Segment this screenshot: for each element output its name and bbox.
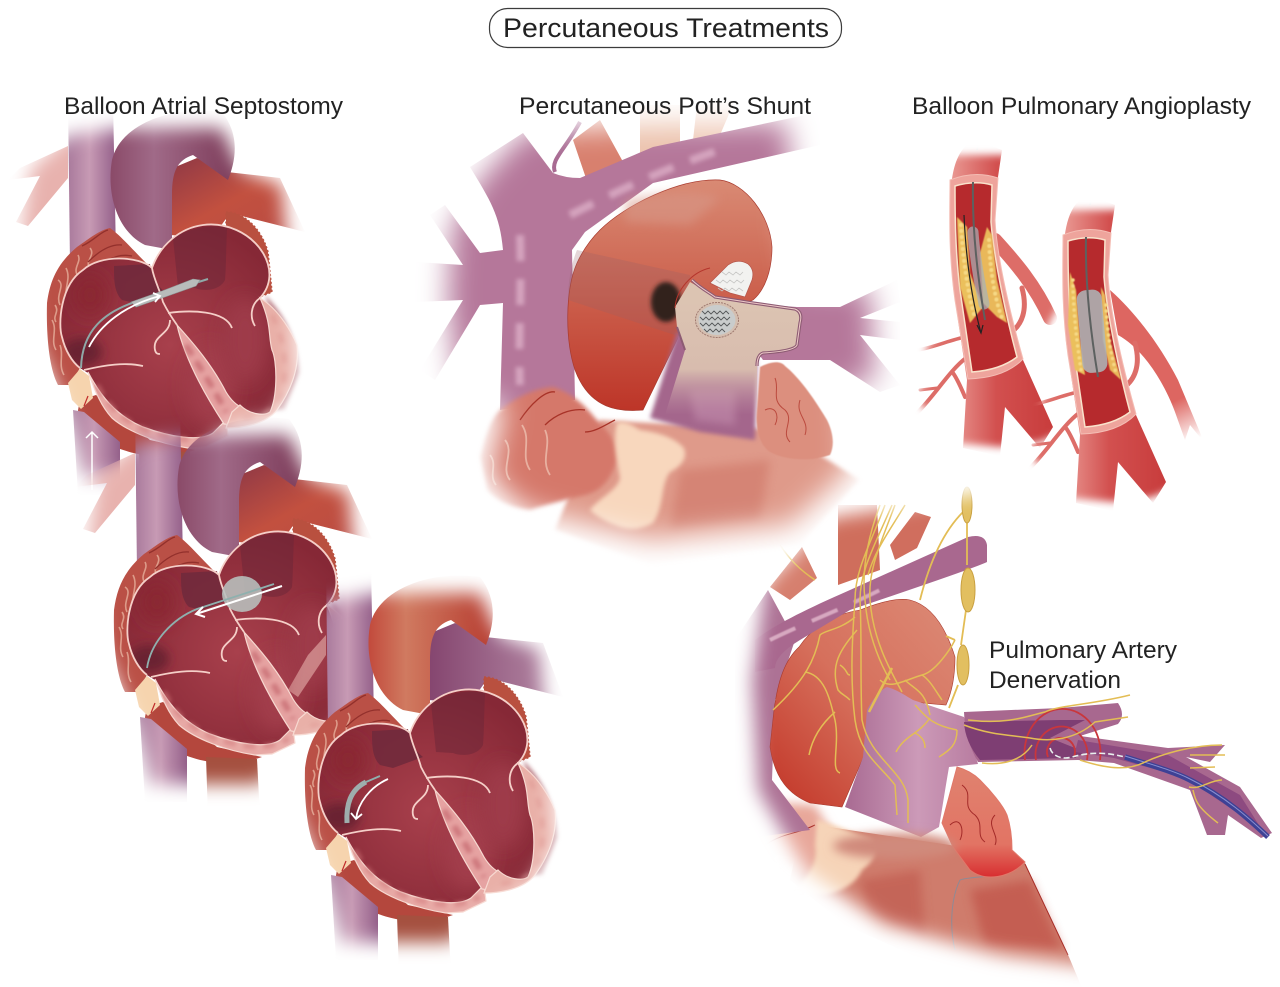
direction arrow: [964, 215, 983, 333]
right appendage: [757, 362, 833, 459]
guide catheter: [1086, 237, 1098, 377]
aorta: [568, 180, 772, 411]
balloon: [973, 232, 984, 304]
denervation catheter: [1050, 748, 1268, 837]
heart cross-section 3: [305, 677, 558, 975]
pulmonary stent disc: [696, 302, 738, 338]
title: [490, 8, 842, 48]
left trunk: [735, 590, 810, 840]
panel: percutaneous potts shunt: [415, 100, 900, 565]
heart cross-section 1: [47, 212, 300, 510]
panel: balloon atrial septostomy step 3: [288, 565, 563, 975]
lumen: [955, 183, 1017, 372]
dissected artery: [964, 703, 1272, 838]
heading: percutaneous potts shunt: Percutaneous Pott’s Shunt: [519, 93, 811, 120]
inflated balloon: [1076, 289, 1108, 374]
title: Percutaneous Treatments: [503, 13, 829, 43]
sheath and balloon catheter: [81, 279, 208, 368]
aortic stent end: [710, 261, 753, 297]
shunt cutaway: [665, 282, 801, 415]
heading: balloon atrial septostomy: Balloon Atrial Septostomy: [64, 93, 343, 120]
shunt vessel wall: [675, 268, 801, 366]
pulmonary vessels: [415, 112, 820, 410]
aorta: [770, 599, 955, 807]
inflated balloon and catheter: [147, 576, 282, 668]
lower trunk: [650, 332, 757, 440]
compressed plaque: [1068, 272, 1121, 380]
guide catheter: [973, 182, 985, 320]
white haze behind step 2: [210, 422, 320, 478]
heading: pulmonary artery denervation: [989, 637, 1177, 694]
ganglion chain: [920, 487, 975, 708]
heart cross-section 2: [114, 520, 340, 798]
right appendage: [942, 767, 1025, 877]
fat pad: [790, 820, 876, 895]
arch vessels: [770, 505, 931, 600]
long right branch: [1110, 290, 1204, 442]
panel: balloon pulmonary angioplasty, artery 2: [1030, 185, 1204, 511]
panel: balloon atrial septostomy step 1: [16, 114, 302, 490]
heading: pulmonary artery denervation: Pulmonary Artery: [989, 637, 1177, 664]
side branches: [917, 240, 1050, 413]
ablation rings: [1024, 709, 1101, 760]
heart body: [555, 420, 860, 565]
artery body: [950, 140, 1053, 456]
panel: balloon pulmonary angioplasty, artery 1: [917, 130, 1053, 456]
translucent band: [568, 250, 690, 340]
retracted sheath: [347, 776, 388, 823]
fat pad: [590, 422, 685, 529]
great vessels at arch: [573, 100, 735, 190]
nerves: [773, 505, 1225, 823]
plaque: [957, 217, 1007, 323]
heading: pulmonary artery denervation: Denervation: [989, 667, 1121, 694]
panel: pulmonary artery denervation: [735, 487, 1272, 987]
guide wire: [976, 150, 978, 151]
guide wire: [1090, 185, 1094, 205]
main pulmonary trunk: [845, 687, 978, 837]
arrow: catheter entry: [86, 432, 98, 490]
upper pulmonary vessel: [755, 536, 987, 672]
dark lumen: [651, 282, 681, 322]
panel: balloon atrial septostomy step 2: [83, 420, 368, 798]
left appendage: [480, 387, 617, 510]
cutaway wall: [950, 174, 1023, 379]
heart body: [790, 823, 1085, 987]
right pulmonary artery: [760, 286, 894, 392]
heading: balloon pulmonary angioplasty: Balloon Pulmonary Angioplasty: [912, 93, 1251, 120]
